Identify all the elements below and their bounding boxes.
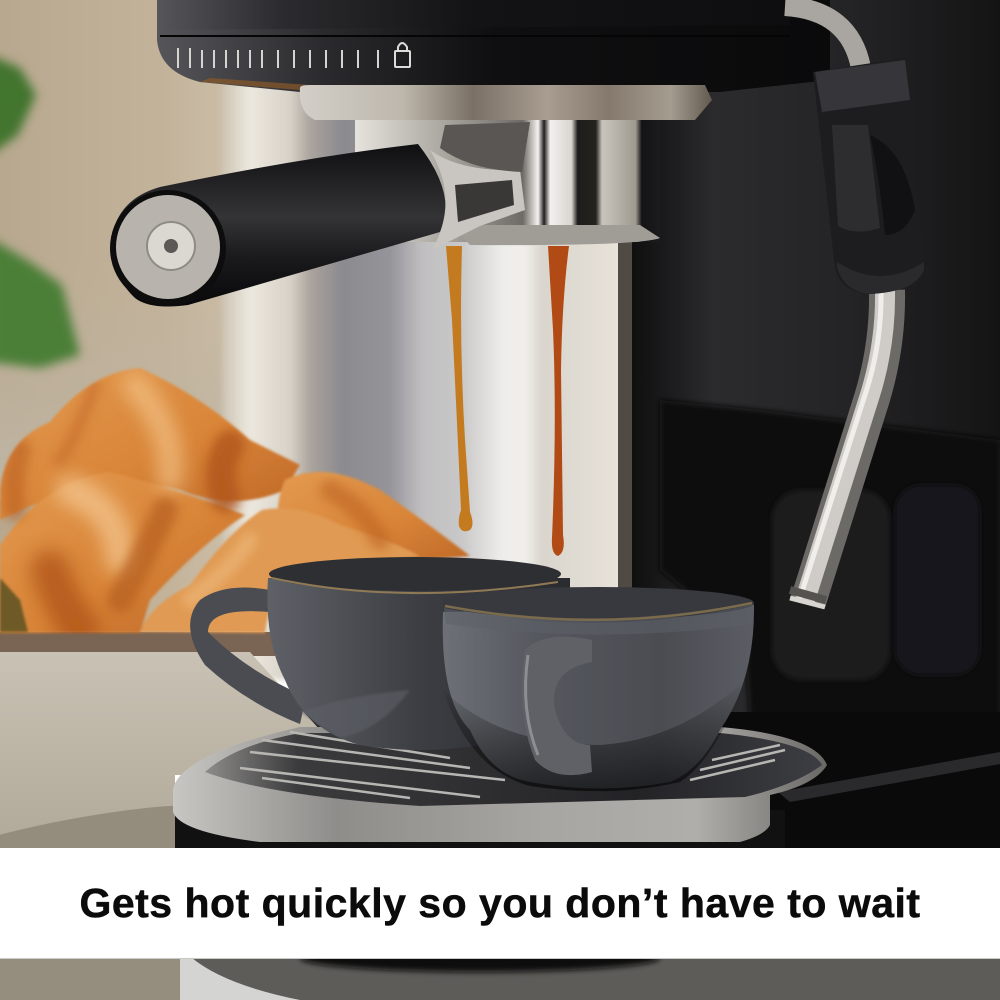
countertop strip [0,805,177,850]
portafilter handle [110,122,530,306]
front cup [442,587,754,791]
cup handle [522,637,592,775]
plant leaves [0,55,80,368]
machine body [618,0,1000,848]
window background [222,80,622,680]
drip tray [173,727,827,848]
steam wand [785,6,887,607]
plate [0,632,275,656]
croissants [0,368,470,633]
back cup [190,557,570,750]
caption text: Gets hot quickly so you don’t have to wait [79,880,921,926]
bottom counter strip [0,944,1000,1000]
towel [0,652,320,835]
under-cup fill [300,640,700,750]
caption band [0,848,1000,958]
strawberry on plate [0,578,28,632]
back cup handle [190,588,306,724]
upper machine housing with dial [157,0,830,120]
wall background [0,0,240,660]
group head [355,120,660,245]
steam wand knob [813,58,925,294]
coffee streams [446,246,569,556]
lock icon [395,43,410,67]
